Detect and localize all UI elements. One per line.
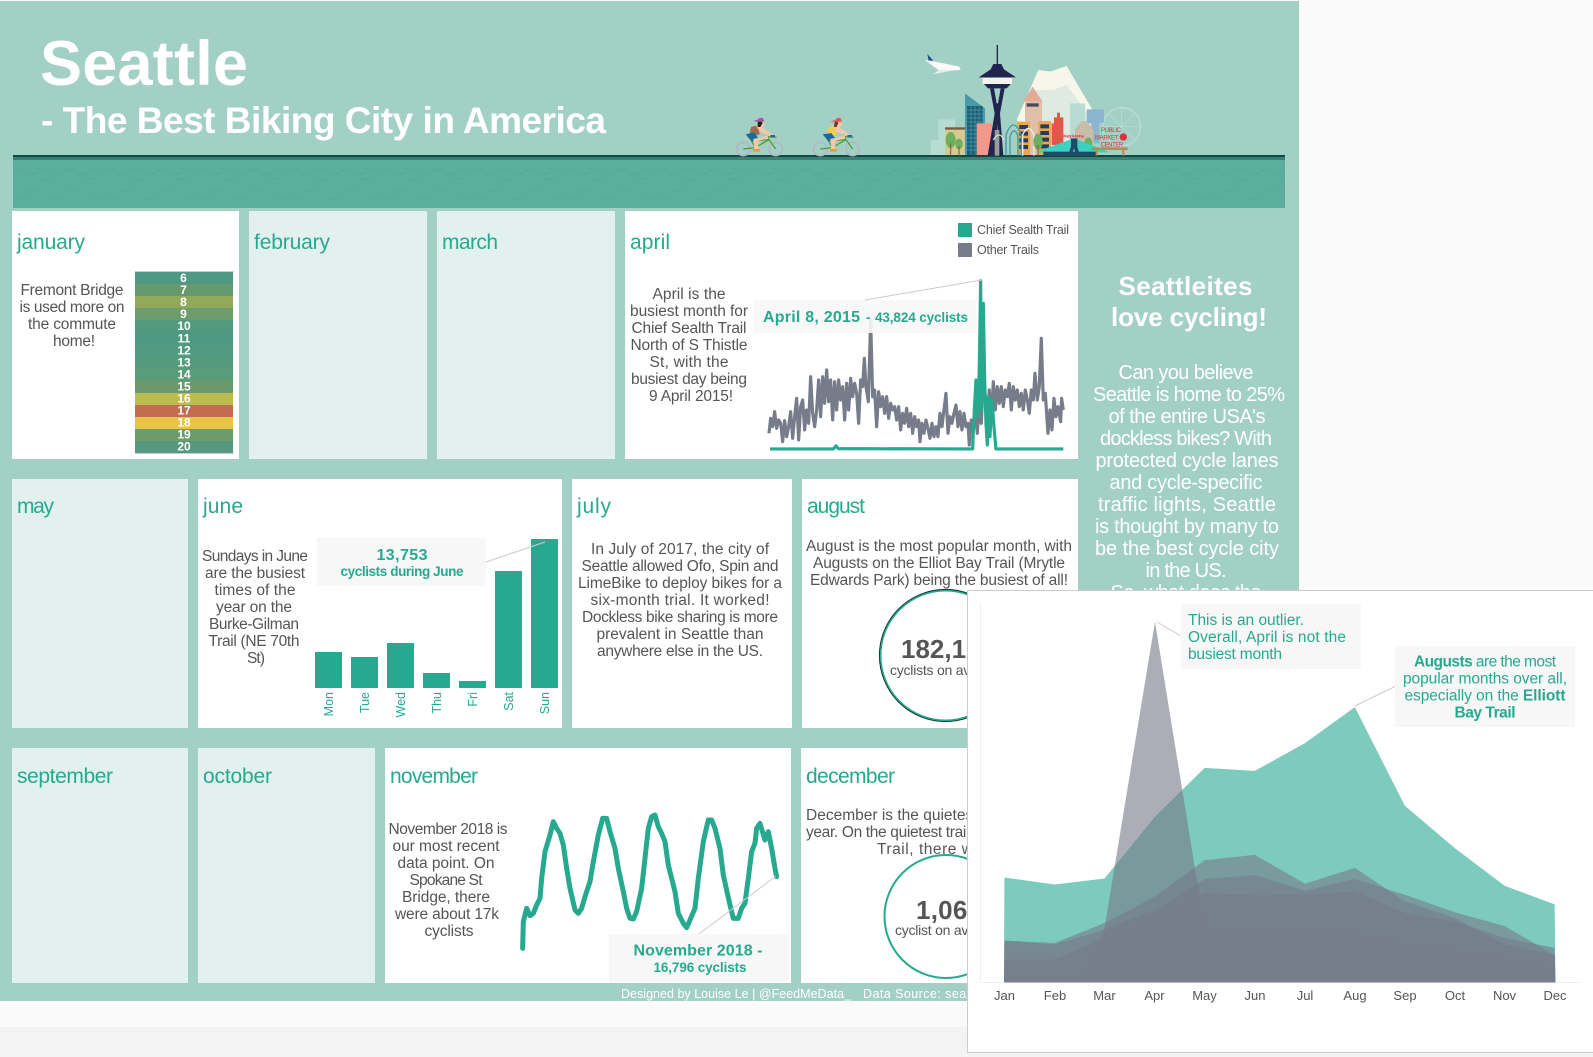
text: November note: data point. On <box>398 855 494 872</box>
chart: hourly heatmap: 16 <box>177 392 191 406</box>
chart: hourly heatmap: 6 <box>180 271 187 285</box>
circle stat: December: 1,066 <box>916 895 982 925</box>
heading: june: june <box>202 495 243 518</box>
panel: february <box>249 211 427 459</box>
footer credit: Designed by Louise Le | @FeedMeData_ <box>621 987 852 1001</box>
circle stat: December <box>884 855 1008 978</box>
text: August note: August is the most popular month, with <box>806 538 1072 555</box>
panel: november <box>385 748 791 983</box>
callout: April outlier: busiest month <box>1188 646 1282 663</box>
panel: january <box>12 211 239 459</box>
circle stat: August: 182,174 <box>901 634 996 664</box>
x axis labels: Nov <box>1493 988 1517 1003</box>
sidebar text <box>1093 362 1285 604</box>
chart: hourly heatmap: 11 <box>178 332 191 346</box>
callout: June total <box>317 538 545 586</box>
sidebar heading: Seattleites <box>1118 271 1252 301</box>
panel: march <box>437 211 615 459</box>
sidebar text: be the best cycle city <box>1095 538 1279 560</box>
chart: hourly heatmap: 17 <box>177 404 191 418</box>
x axis labels: Oct <box>1445 988 1465 1003</box>
panel: october <box>198 748 375 983</box>
bar chart: cyclists by weekday: Mon <box>322 692 336 716</box>
text: November note: our most recent <box>392 838 500 855</box>
text: January note: is used more on <box>20 299 124 316</box>
panel: september <box>12 748 188 983</box>
x axis labels: Feb <box>1044 988 1066 1003</box>
icon: cyclist one <box>737 118 782 156</box>
text: December note: year. On the quietest trail, Burke-Gilman <box>806 824 1068 841</box>
bar chart: cyclists by weekday: Wed <box>394 692 408 717</box>
text: July note <box>578 541 782 660</box>
x axis labels: Aug <box>1343 988 1367 1003</box>
sidebar text: protected cycle lanes <box>1096 450 1278 472</box>
text: December note: Trail, there were <box>877 841 997 858</box>
text: April note: North of S Thistle <box>630 337 748 354</box>
circle stat: August <box>880 590 1012 722</box>
area chart: trails by month <box>1004 622 1555 982</box>
icon: space needle <box>979 45 1016 156</box>
text: August note <box>806 538 1072 589</box>
chart: hourly heatmap: 13 <box>177 356 191 370</box>
circle stat: December: cyclist on average <box>895 922 1003 938</box>
x axis labels: Dec <box>1543 988 1567 1003</box>
text: August note: Augusts on the Elliot Bay Trail (Mrytle <box>813 555 1065 572</box>
chart: hourly heatmap: 15 <box>177 380 191 394</box>
sidebar text: So, what does the <box>1110 582 1262 604</box>
heading: july: july <box>576 495 612 518</box>
line chart: seasonal trend <box>523 815 777 948</box>
sidebar heading: love cycling! <box>1111 302 1267 332</box>
water strip <box>13 155 1285 208</box>
chart: hourly heatmap <box>135 271 234 454</box>
text: June note: Trail (NE 70th <box>208 633 300 650</box>
text: April note: busiest day being <box>631 371 747 388</box>
text: November note: November 2018 is <box>388 821 508 838</box>
callout: April 8: April 8, 2015 <box>763 309 860 326</box>
callout: April outlier: Overall, April is not the <box>1188 629 1346 646</box>
x axis labels: Jun <box>1245 988 1265 1003</box>
sidebar text: and cycle-specific <box>1110 472 1262 494</box>
chart: hourly heatmap: 12 <box>177 344 191 358</box>
sidebar: Seattleites love cycling <box>1093 271 1285 604</box>
text: July note: prevalent in Seattle than <box>596 626 764 643</box>
text: April note: St, with the <box>650 354 728 371</box>
text: July note: Seattle allowed Ofo, Spin and <box>582 558 778 575</box>
callout: November 2018: November 2018 - <box>634 942 762 960</box>
callout: April 8 <box>754 280 982 333</box>
callout: November 2018 <box>609 876 789 982</box>
x axis labels: Sep <box>1393 988 1417 1003</box>
callout: April outlier <box>1157 604 1361 669</box>
heading: september: september <box>17 765 113 788</box>
illustration: Seattle skyline: MARKET <box>1095 135 1119 141</box>
sidebar text: dockless bikes? With <box>1100 428 1272 450</box>
legend: Other Trails <box>977 243 1039 257</box>
bar chart: cyclists by weekday: Thu <box>430 692 444 714</box>
heading: december: december <box>806 765 895 788</box>
heading: may: may <box>17 495 54 518</box>
overlay panel: monthly area chart <box>968 590 1593 1052</box>
text: June note: times of the <box>214 582 296 599</box>
illustration: Seattle skyline: KeyArena <box>1063 134 1084 139</box>
illustration: Seattle skyline: CENTER <box>1101 143 1124 149</box>
heading: november: november <box>390 765 478 788</box>
callout: August peak: popular months over all, <box>1403 670 1567 688</box>
text: April note: April is the <box>652 286 726 303</box>
text: June note: year on the <box>216 599 292 616</box>
text: November note: Spokane St <box>410 872 483 889</box>
sidebar heading <box>1111 271 1267 332</box>
x axis labels: Jan <box>994 988 1015 1003</box>
heading: august: august <box>807 495 865 518</box>
illustration: Seattle skyline <box>925 45 1141 156</box>
text: June note: St) <box>247 650 265 667</box>
x axis labels: Jul <box>1297 988 1313 1003</box>
callout: June total: cyclists during June <box>340 564 464 579</box>
text: June note: Sundays in June <box>202 548 308 565</box>
chart: hourly heatmap: 9 <box>180 307 187 321</box>
footer credit <box>621 987 1011 1001</box>
x axis labels <box>994 988 1567 1003</box>
callout: April 8: - <box>866 310 870 325</box>
bar chart: cyclists by weekday <box>315 539 558 717</box>
text: January note <box>20 282 124 350</box>
text: November note: were about 17k <box>394 906 499 923</box>
text: July note: anywhere else in the US. <box>597 643 763 660</box>
callout: August peak: especially on the Elliott <box>1404 688 1566 704</box>
heading: march: march <box>442 231 498 254</box>
text: July note: LimeBike to deploy bikes for a <box>578 575 782 592</box>
text: August note: Edwards Park) being the busiest of all! <box>810 572 1068 589</box>
callout: June total: 13,753 <box>376 547 428 564</box>
heading: april: april <box>630 231 670 254</box>
circle stat: August: cyclists on average <box>890 662 1005 678</box>
text: April note: busiest month for <box>630 303 748 320</box>
text: April note <box>630 286 748 405</box>
sidebar text: in the US. <box>1146 560 1226 582</box>
heading: october: october <box>203 765 272 788</box>
panel: june <box>198 479 562 728</box>
text: April note: 9 April 2015! <box>649 388 733 405</box>
callout: August peak: Augusts are the most <box>1414 654 1557 670</box>
callout: April 8: 43,824 cyclists <box>875 310 968 325</box>
text: April note: Chief Sealth Trail <box>632 320 746 337</box>
text: December note <box>806 807 1068 858</box>
text: July note: six-month trial. It worked! <box>590 592 770 609</box>
sidebar text: Seattle is home to 25% <box>1093 384 1285 406</box>
callout: August peak <box>1355 646 1575 727</box>
chart: hourly heatmap: 10 <box>177 319 191 333</box>
x axis labels: May <box>1192 988 1217 1003</box>
bar chart: cyclists by weekday: Fri <box>466 692 480 707</box>
text: June note: are the busiest <box>205 565 306 582</box>
panel: july <box>572 479 792 728</box>
sidebar text: of the entire USA's <box>1108 406 1266 428</box>
illustration: Seattle skyline: PUBLIC <box>1101 128 1122 134</box>
text: January note: Fremont Bridge <box>20 282 124 299</box>
x axis labels: Mar <box>1093 988 1116 1003</box>
chart: hourly heatmap: 14 <box>177 368 191 382</box>
text: June note <box>202 548 308 667</box>
icon: cyclist two <box>814 118 859 156</box>
text: June note: Burke-Gilman <box>209 616 299 633</box>
line chart: daily counts <box>769 281 1063 449</box>
chart: hourly heatmap: 20 <box>177 440 191 454</box>
heading: january: january <box>16 231 86 254</box>
sidebar text: Can you believe <box>1118 362 1254 384</box>
text: November note: Bridge, there <box>402 889 490 906</box>
text: July note: In July of 2017, the city of <box>591 541 770 558</box>
icon: airplane <box>925 54 961 74</box>
panel: april <box>625 211 1078 459</box>
bar chart: cyclists by weekday: Tue <box>358 692 372 713</box>
callout: August peak: Bay Trail <box>1454 704 1516 722</box>
text: November note <box>388 821 508 940</box>
text: December note: December is the quietest month of the <box>806 807 1068 824</box>
panel: december <box>801 748 1078 983</box>
callout: April outlier: This is an outlier. <box>1188 612 1304 629</box>
text: November note: cyclists <box>424 923 474 940</box>
panel: august <box>802 479 1078 728</box>
sidebar text: traffic lights, Seattle <box>1098 494 1276 516</box>
chart: hourly heatmap: 7 <box>180 283 187 297</box>
legend <box>958 223 1069 257</box>
text: January note: the commute <box>28 316 116 333</box>
heading: february: february <box>254 231 330 254</box>
text: July note: Dockless bike sharing is more <box>582 609 778 626</box>
chart: hourly heatmap: 8 <box>180 295 187 309</box>
footer credit: Data Source: seattle.gov <box>863 987 1011 1001</box>
chart: hourly heatmap: 18 <box>177 416 191 430</box>
chart: hourly heatmap: 19 <box>177 428 191 442</box>
title: Seattle <box>40 29 248 99</box>
panel: may <box>12 479 188 728</box>
x axis labels: Apr <box>1144 988 1165 1003</box>
bar chart: cyclists by weekday: Sun <box>538 692 552 714</box>
subtitle: - The Best Biking City in America <box>41 100 606 141</box>
text: January note: home! <box>53 333 95 350</box>
sidebar text: is thought by many to <box>1095 516 1279 538</box>
legend: Chief Sealth Trail <box>977 223 1069 237</box>
bar chart: cyclists by weekday: Sat <box>502 691 516 711</box>
callout: November 2018: 16,796 cyclists <box>654 960 746 975</box>
